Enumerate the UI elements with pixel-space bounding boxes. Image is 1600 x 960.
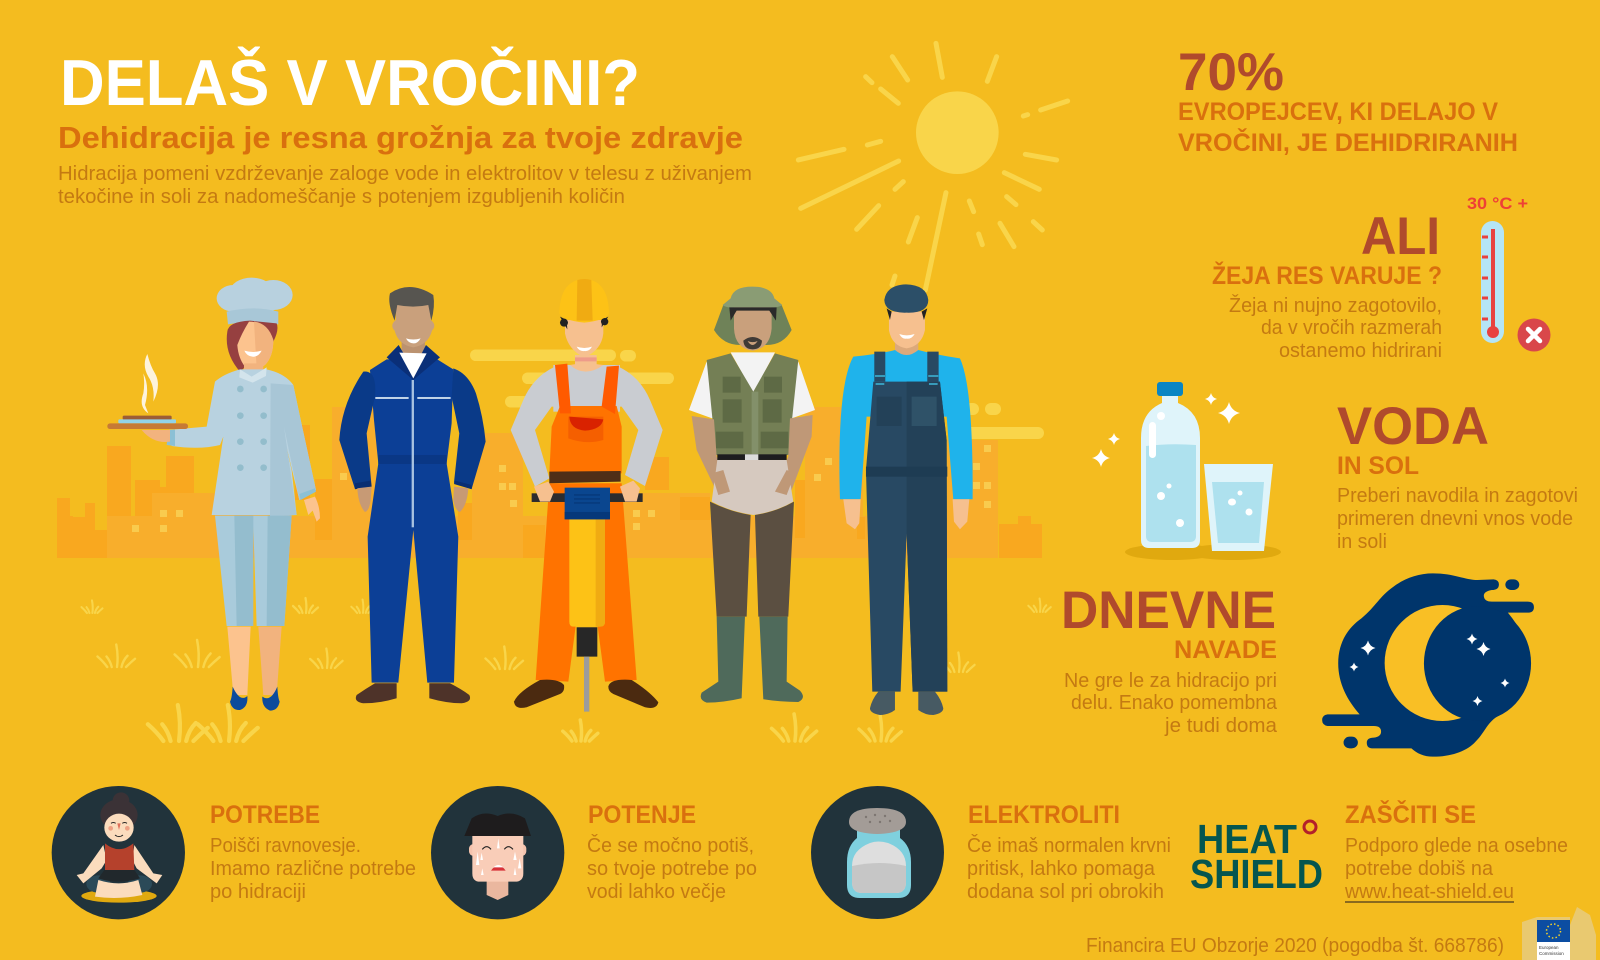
grey shirt bbox=[511, 365, 663, 487]
orange overalls bbox=[536, 364, 637, 682]
stat: 70%: VROČINI, JE DEHIDRIRANIH bbox=[1178, 127, 1518, 157]
block: voda in sol: IN SOL bbox=[1337, 452, 1419, 480]
heading and text: zaščiti se bbox=[1344, 799, 1568, 903]
block: ali žeja res varuje: ŽEJA RES VARUJE ? bbox=[1212, 260, 1442, 290]
overalls bbox=[866, 352, 947, 692]
icon: thermometer: 30 °C + bbox=[1467, 194, 1528, 213]
heading and text: zaščiti se: potrebe dobiš na bbox=[1345, 858, 1494, 880]
logo: heat shield: SHIELD bbox=[1190, 851, 1323, 897]
heading and text: potenje: so tvoje potrebe po bbox=[587, 858, 757, 880]
heading and text: elektroliti: pritisk, lahko pomaga bbox=[967, 858, 1156, 880]
heading and text: elektroliti: Če imaš normalen krvni bbox=[967, 834, 1171, 857]
subtitle: Dehidracija je resna grožnja za tvoje zdravje bbox=[58, 120, 743, 155]
block: ali žeja res varuje: ostanemo hidrirani bbox=[1279, 340, 1442, 362]
heading and text: elektroliti: ELEKTROLITI bbox=[968, 801, 1120, 829]
block: dnevne navade: Ne gre le za hidracijo pri bbox=[1064, 670, 1277, 692]
heading and text: potenje: vodi lahko večje bbox=[587, 881, 726, 903]
heading and text: zaščiti se: www.heat-shield.eu bbox=[1344, 881, 1514, 903]
intro text: Hidracija pomeni vzdrževanje zaloge vode in elektrolitov v telesu z uživanjem bbox=[58, 163, 752, 185]
chef hat bbox=[217, 278, 293, 324]
vest bbox=[707, 353, 798, 455]
hat bbox=[714, 287, 792, 345]
figure: construction worker with jackhammer bbox=[511, 279, 663, 712]
coverall bbox=[339, 345, 486, 683]
block: dnevne navade: DNEVNE bbox=[1061, 581, 1276, 640]
block: voda in sol: primeren dnevni vnos vode bbox=[1337, 508, 1573, 530]
block: voda in sol: VODA bbox=[1337, 397, 1489, 456]
chef jacket bbox=[167, 367, 316, 517]
figure: worker in bib overalls bbox=[839, 284, 973, 715]
block: voda in sol bbox=[1337, 397, 1578, 553]
tray with plate bbox=[107, 354, 188, 429]
helmet bbox=[559, 279, 609, 323]
intro text bbox=[58, 163, 752, 208]
heading and text: potrebe: Poišči ravnovesje. bbox=[210, 835, 361, 857]
city skyline bbox=[57, 407, 1042, 558]
heading and text: elektroliti: dodana sol pri obrokih bbox=[967, 881, 1164, 903]
block: dnevne navade: NAVADE bbox=[1174, 636, 1277, 664]
heading and text: potenje: Če se močno potiš, bbox=[587, 834, 754, 857]
stat: 70%: 70% bbox=[1178, 43, 1284, 102]
block: dnevne navade bbox=[1061, 581, 1278, 737]
funding note: Financira EU Obzorje 2020 (pogodba št. 668786) bbox=[1086, 935, 1504, 957]
heading and text: potenje bbox=[587, 801, 757, 903]
logo: heat shield bbox=[1190, 816, 1323, 897]
logo: european commission bbox=[1522, 907, 1596, 960]
stat: 70%: EVROPEJCEV, KI DELAJO V bbox=[1178, 98, 1498, 126]
icon: salt shaker bbox=[811, 786, 944, 919]
heading and text: zaščiti se: ZAŠČITI SE bbox=[1345, 799, 1476, 829]
block: ali žeja res varuje bbox=[1212, 207, 1442, 362]
clouds bbox=[470, 350, 1044, 439]
icon: thermometer bbox=[1467, 194, 1528, 343]
block: voda in sol: Preberi navodila in zagotovi bbox=[1337, 485, 1578, 507]
grass tufts bbox=[81, 598, 1051, 741]
block: ali žeja res varuje: Žeja ni nujno zagotovilo, bbox=[1229, 294, 1442, 317]
heading and text: elektroliti bbox=[967, 801, 1171, 903]
icon: water bottle and glass bbox=[1092, 382, 1281, 560]
figure: chef bbox=[107, 278, 320, 711]
figure: worker in blue coverall bbox=[339, 287, 486, 703]
icon: sweating face bbox=[431, 786, 564, 919]
stat: 70% bbox=[1178, 43, 1518, 157]
sun with rays bbox=[798, 43, 1068, 290]
heading and text: potenje: POTENJE bbox=[588, 801, 696, 829]
logo: heat shield: HEAT bbox=[1197, 816, 1297, 862]
icon: red cross bbox=[1518, 318, 1550, 352]
blue shirt bbox=[839, 350, 973, 499]
heading and text: potrebe bbox=[210, 801, 416, 903]
logo: european commission: European bbox=[1539, 945, 1559, 950]
block: voda in sol: in soli bbox=[1337, 531, 1387, 553]
block: dnevne navade: je tudi doma bbox=[1164, 715, 1278, 737]
intro text: tekočine in soli za nadomeščanje s potenjem izgubljenih količin bbox=[58, 186, 625, 208]
heading and text: potrebe: po hidraciji bbox=[210, 881, 306, 903]
figure: farmer with hat and vest bbox=[689, 287, 815, 703]
block: ali žeja res varuje: ALI bbox=[1361, 207, 1440, 266]
jackhammer bbox=[532, 488, 643, 712]
block: dnevne navade: delu. Enako pomembna bbox=[1071, 692, 1278, 714]
block: ali žeja res varuje: da v vročih razmerah bbox=[1261, 317, 1442, 339]
chef pants bbox=[215, 516, 292, 626]
title: DELAŠ V VROČINI? bbox=[60, 46, 640, 119]
heading and text: potrebe: Imamo različne potrebe bbox=[210, 858, 416, 880]
icon: meditating woman bbox=[52, 786, 185, 919]
heading and text: zaščiti se: Podporo glede na osebne bbox=[1345, 835, 1568, 857]
logo: european commission: Commission bbox=[1539, 951, 1564, 956]
icon: moon at night bbox=[1322, 573, 1534, 757]
heading and text: potrebe: POTREBE bbox=[210, 801, 320, 829]
